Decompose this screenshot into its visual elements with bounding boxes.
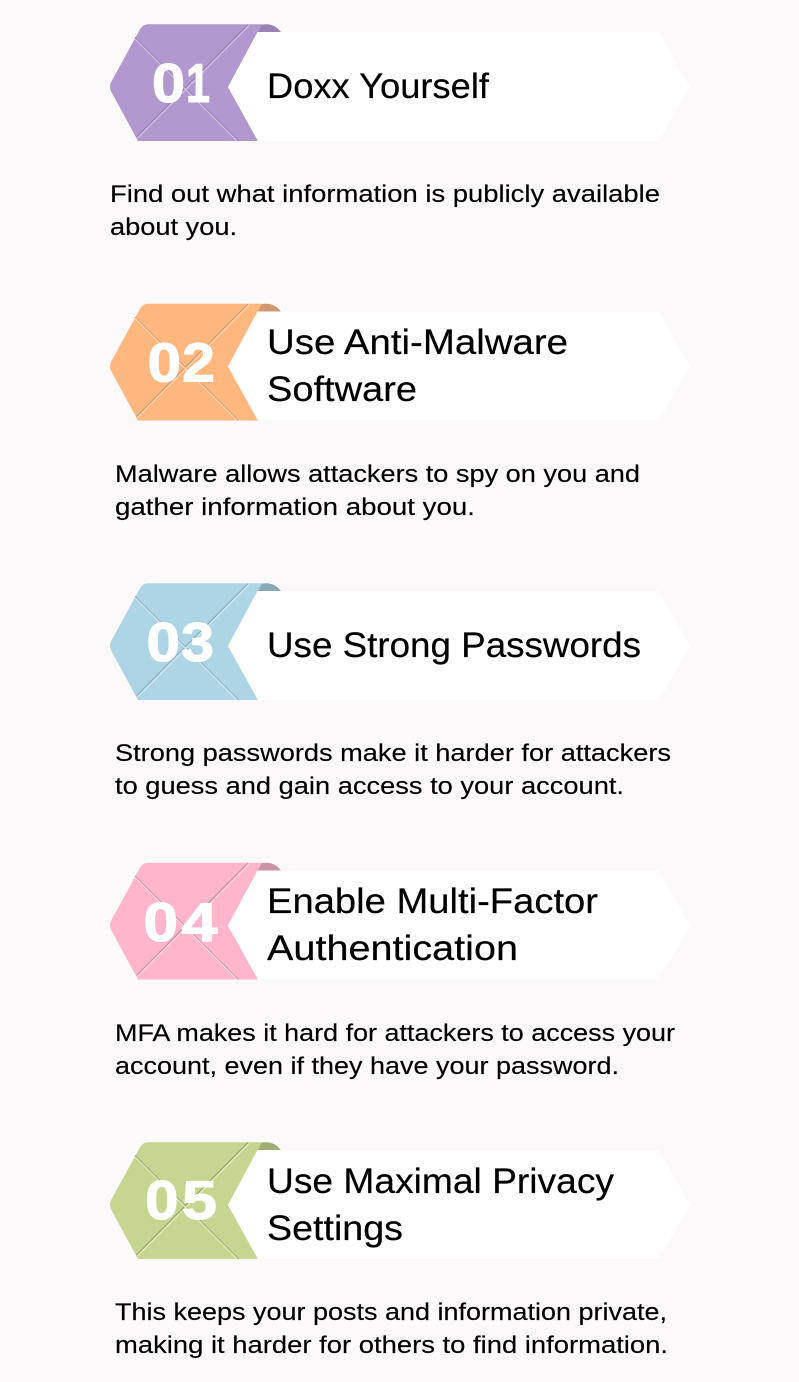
step 4 number: 4 (182, 891, 218, 953)
step 2 description: gather information about you. (115, 494, 475, 521)
step 5 title (267, 1162, 615, 1248)
step 1 description (110, 181, 660, 241)
step 5 number (145, 1169, 217, 1231)
step 3 ribbon badge (110, 583, 690, 700)
step 5 panel (110, 1142, 690, 1359)
step 4 ribbon badge (110, 863, 690, 980)
step 5 number: 5 (182, 1169, 217, 1231)
step 3 title: Use Strong Passwords (267, 626, 641, 665)
step 1 number: 1 (186, 52, 210, 114)
step 4 number (144, 891, 218, 953)
step 2 title (267, 323, 568, 409)
step 1 description: about you. (110, 214, 237, 241)
step 1 title: Doxx Yourself (267, 67, 489, 106)
step 4 description (115, 1020, 675, 1080)
step 3 description: to guess and gain access to your account. (115, 773, 624, 800)
step 2 description: Malware allows attackers to spy on you and (115, 461, 640, 488)
step 2 title: Software (267, 370, 417, 409)
step 5 ribbon badge (110, 1142, 690, 1259)
step 3 panel (110, 583, 690, 800)
step 5 number: 0 (145, 1169, 178, 1231)
step 4 title: Authentication (267, 929, 518, 968)
step 5 title: Use Maximal Privacy (267, 1162, 615, 1201)
step 3 number: 0 (146, 611, 180, 673)
step 4 number: 0 (144, 891, 178, 953)
step 2 title: Use Anti-Malware (267, 323, 568, 362)
step 3 description (115, 740, 671, 800)
step 4 title: Enable Multi-Factor (267, 882, 598, 921)
step 1 description: Find out what information is publicly available (110, 181, 660, 208)
step 1 ribbon badge (110, 24, 690, 141)
step 5 description (115, 1299, 668, 1359)
step 5 title: Settings (267, 1209, 403, 1248)
step 2 number: 2 (182, 332, 215, 394)
step 3 number: 3 (181, 611, 214, 673)
step 4 panel (110, 863, 690, 1080)
step 1 panel (110, 24, 690, 241)
step 2 ribbon badge (110, 304, 690, 420)
step 2 description (115, 461, 640, 521)
step 2 number (148, 332, 215, 394)
step 2 number: 0 (148, 332, 181, 394)
step 5 description: making it harder for others to find information. (115, 1332, 668, 1359)
step 4 description: MFA makes it hard for attackers to access your (115, 1020, 675, 1047)
step 5 description: This keeps your posts and information private, (115, 1299, 667, 1326)
step 4 description: account, even if they have your password. (115, 1053, 619, 1080)
step 3 number (146, 611, 214, 673)
step 3 description: Strong passwords make it harder for attackers (115, 740, 671, 767)
step 4 title (267, 882, 598, 968)
step 1 number (152, 52, 210, 114)
step 1 number: 0 (152, 52, 185, 114)
step 2 panel (110, 304, 690, 521)
